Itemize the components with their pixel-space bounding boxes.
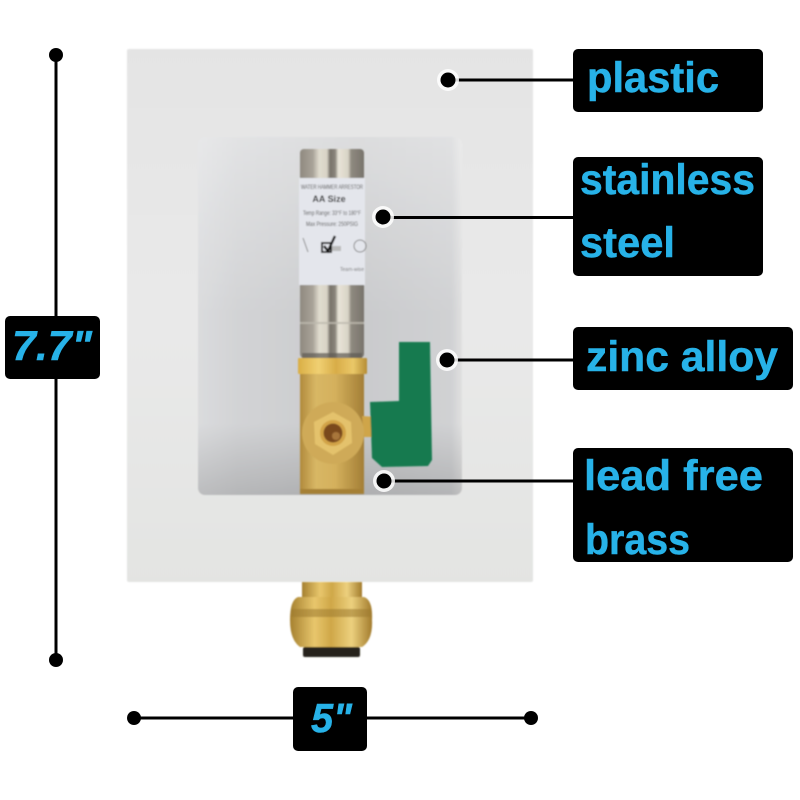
pointer: lead free brass	[373, 470, 573, 492]
icon: certification seals	[303, 238, 366, 252]
label: zinc alloy	[573, 327, 793, 390]
label: plastic: plastic	[587, 54, 719, 102]
label: lead free brass: lead free	[584, 452, 763, 500]
label: stainless steel: stainless	[580, 156, 755, 204]
width dimension line	[127, 711, 538, 725]
label: lead free brass	[573, 448, 793, 564]
icon: check mark certification	[322, 236, 341, 252]
plastic outlet box	[127, 49, 533, 582]
brass valve body	[298, 358, 367, 494]
product label: Max Pressure: 250PSIG	[306, 222, 358, 228]
stainless steel cylinder	[300, 149, 364, 358]
valve stem	[362, 416, 378, 437]
product label: Team-wise	[340, 267, 364, 273]
pointer: plastic	[437, 69, 573, 91]
arrester and valve assembly	[298, 149, 432, 494]
height label: 7.7"	[12, 322, 93, 369]
product label: WATER HAMMER ARRESTOR	[301, 184, 363, 191]
label: lead free brass: brass	[585, 516, 690, 564]
product label: Temp Range: 33°F to 180°F	[303, 211, 361, 217]
label: zinc alloy: zinc alloy	[586, 333, 778, 381]
label: plastic	[573, 49, 763, 112]
width label	[293, 687, 367, 751]
brass push-fit cap	[290, 582, 372, 657]
label: stainless steel	[573, 156, 763, 276]
height label	[5, 316, 100, 379]
pointer: stainless steel	[372, 206, 573, 228]
label: stainless steel: steel	[580, 219, 675, 267]
product label: AA Size	[312, 194, 346, 204]
width label: 5"	[311, 695, 353, 741]
drain port	[302, 402, 364, 464]
product label	[299, 178, 366, 285]
height dimension line	[49, 48, 63, 667]
green valve handle	[370, 342, 432, 467]
pointer: zinc alloy	[436, 349, 573, 371]
